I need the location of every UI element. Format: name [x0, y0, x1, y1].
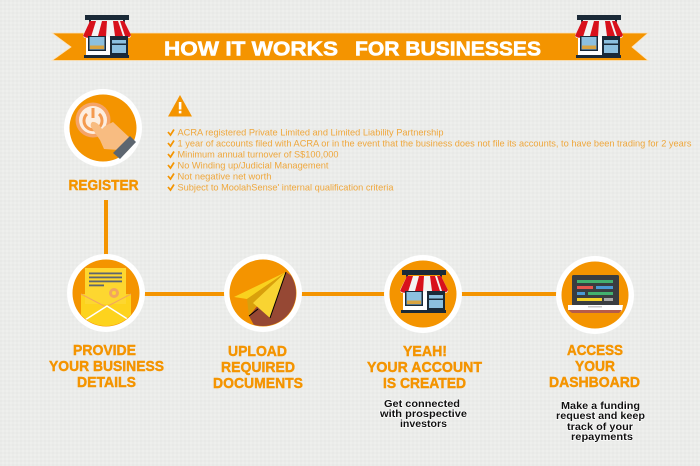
eligibility checklist: Subject to MoolahSense' internal qualification criteria — [178, 182, 394, 194]
title: FOR BUSINESSES — [355, 38, 541, 60]
step text: provide business details: YOUR BUSINESS — [49, 358, 164, 375]
note: prospective investors: with prospective — [379, 409, 467, 420]
step text: access dashboard: DASHBOARD — [549, 374, 640, 391]
step text: access dashboard: ACCESS — [567, 342, 623, 359]
step text: account created — [367, 343, 482, 392]
step text: upload documents: UPLOAD — [228, 343, 287, 360]
title: HOW IT WORKS — [164, 38, 338, 60]
note: prospective investors — [379, 399, 467, 430]
note: funding request: repayments — [571, 432, 633, 443]
step text: upload documents — [213, 343, 303, 392]
icon: envelope — [67, 254, 145, 334]
icon: laptop dashboard — [556, 256, 634, 334]
note: funding request: request and keep — [556, 411, 645, 422]
note: prospective investors: Get connected — [384, 399, 460, 410]
step text: upload documents: REQUIRED — [221, 359, 295, 376]
step text: provide business details: DETAILS — [77, 374, 136, 391]
eligibility checklist — [168, 128, 692, 194]
eligibility checklist: No Winding up/Judicial Management — [178, 160, 329, 172]
connector lines — [104, 200, 596, 296]
heading: register: REGISTER — [68, 177, 139, 194]
eligibility checklist: Minimum annual turnover of S$100,000 — [178, 150, 338, 160]
step text: provide business details: PROVIDE — [73, 342, 136, 359]
icon: shop in circle — [384, 255, 462, 333]
icon: warning triangle — [168, 95, 192, 116]
step text: access dashboard — [549, 342, 640, 391]
note: funding request: track of your — [567, 422, 633, 433]
title banner — [52, 33, 648, 60]
step text: account created: YEAH! — [403, 343, 447, 360]
step text: account created: YOUR ACCOUNT — [367, 359, 482, 376]
eligibility checklist: 1 year of accounts filed with ACRA or in the event that the business does not file its accounts, to have been trading for 2 years — [178, 138, 692, 150]
note: funding request — [556, 401, 645, 443]
icon: left shop — [83, 15, 131, 58]
step text: provide business details — [49, 342, 164, 391]
note: prospective investors: investors — [400, 419, 447, 430]
icon: right shop — [575, 15, 623, 58]
note: funding request: Make a funding — [561, 401, 640, 412]
step: register icon — [64, 89, 142, 167]
step text: upload documents: DOCUMENTS — [213, 375, 303, 392]
eligibility checklist: ACRA registered Private Limited and Limited Liability Partnership — [178, 128, 444, 138]
step text: account created: IS CREATED — [383, 375, 466, 392]
eligibility checklist: Not negative net worth — [178, 172, 272, 182]
step text: access dashboard: YOUR — [575, 358, 615, 375]
icon: paper plane — [224, 254, 302, 332]
